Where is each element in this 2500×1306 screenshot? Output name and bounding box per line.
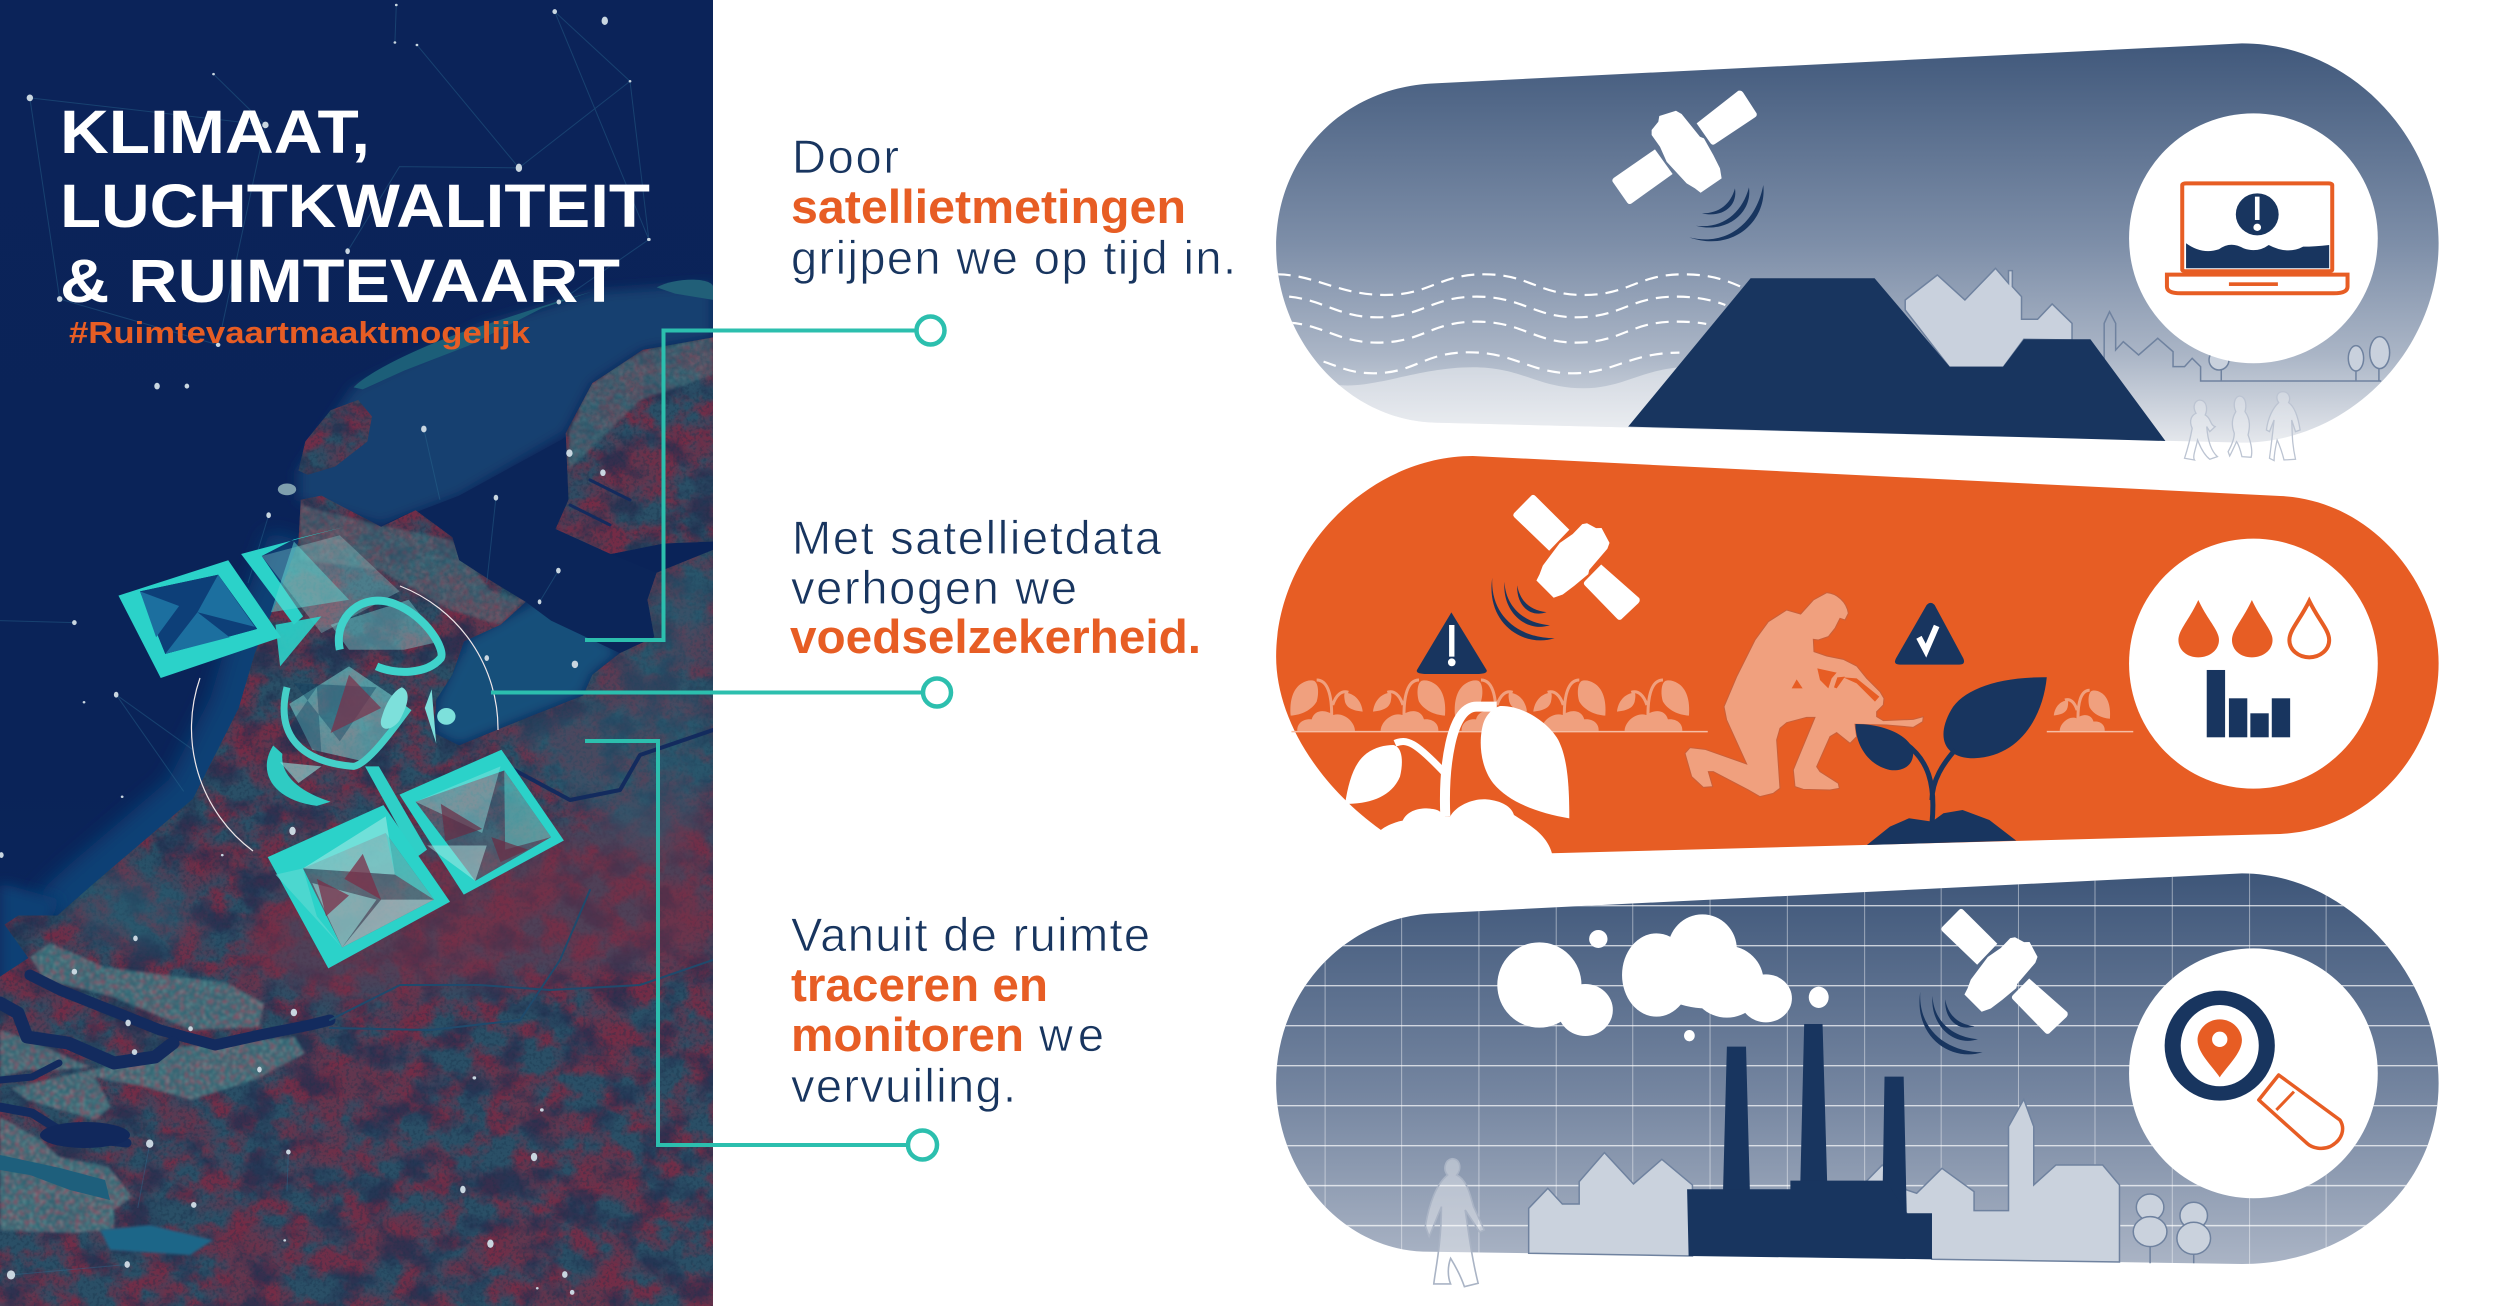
- dike: [1628, 278, 2165, 441]
- panel: satellite map: [0, 0, 713, 1306]
- connector: top line: [585, 316, 944, 640]
- text block: satellite measurements: [791, 130, 1236, 284]
- parcel: top right square: [241, 527, 400, 666]
- hashtag: #Ruimtevaartmaaktmogelijk: [69, 315, 531, 350]
- illustration: farmer: [1685, 593, 1923, 797]
- map: land texture: [0, 337, 713, 1306]
- text block: food security: voedselzekerheid.: [790, 610, 1201, 663]
- parcel: central rings: [267, 600, 456, 858]
- icon: laptop with flood alert: [2167, 183, 2348, 293]
- title: [60, 98, 650, 315]
- bar chart: [2207, 670, 2290, 737]
- title: KLIMAAT,: [60, 98, 370, 166]
- illustration: large white wilting plant: [1345, 706, 1569, 867]
- panel: pollution pill: [1270, 870, 2449, 1303]
- text block: satellite measurements: grijpen we op tijd in.: [791, 231, 1236, 284]
- text block: satellite measurements: Door: [792, 130, 899, 183]
- map: cyan parcel shapes: [118, 527, 564, 968]
- icon: check triangle: [1895, 603, 1964, 665]
- map: teal zones: [60, 550, 713, 950]
- text block: food security: verhogen we: [791, 561, 1077, 614]
- text block: pollution monitoring: Vanuit de ruimte: [791, 908, 1150, 961]
- icon: satellite with signal, food pill: [1475, 479, 1644, 648]
- circle: icon background: [2129, 539, 2378, 789]
- pill background and circle: [1276, 456, 2439, 853]
- map: thin orbit arc: [191, 586, 498, 851]
- water waves: [1278, 274, 1744, 430]
- text block: pollution monitoring: we: [1038, 1008, 1104, 1061]
- text block: pollution monitoring: traceren en: [791, 958, 1048, 1011]
- circle: magnifier background: [2129, 948, 2378, 1198]
- text block: food security: [790, 511, 1201, 663]
- panel: food security pill: [1276, 456, 2439, 867]
- seedlings: [1290, 680, 2110, 731]
- icon: satellite with signal, pollution pill: [1903, 893, 2072, 1062]
- map: central red zone: [240, 800, 713, 1000]
- map: Zeeland speckled fields: [0, 942, 306, 1234]
- title: LUCHTKWALITEIT: [60, 172, 650, 240]
- city skyline right: [1867, 1099, 2119, 1262]
- factory: [1687, 1024, 1932, 1259]
- text block: food security: Met satellietdata: [792, 511, 1162, 564]
- illustration: healthy navy plant: [1855, 677, 2047, 845]
- text block: pollution monitoring: vervuiling.: [791, 1059, 1016, 1112]
- title: & RUIMTEVAART: [60, 247, 620, 315]
- icon: magnifier with location pin: [2165, 991, 2343, 1148]
- map: coastal shallows: [0, 280, 713, 1008]
- parcel: smaller lower square: [400, 750, 564, 895]
- icon: satellite with signal, sea level pill: [1612, 91, 1764, 241]
- icon: water drops: [2178, 600, 2329, 657]
- city skyline left: [1529, 1153, 1692, 1256]
- smoke clouds: [1497, 914, 1829, 1041]
- city behind dike: [1905, 268, 2072, 367]
- map: rivers and estuaries: [0, 480, 713, 1143]
- icon: warning triangle: [1417, 612, 1487, 674]
- text block: pollution monitoring: monitoren: [791, 1008, 1024, 1061]
- person: [1425, 1159, 1484, 1287]
- map: network of dots and lines: [0, 4, 651, 1295]
- trees: [2133, 1194, 2211, 1263]
- connector: bottom line: [585, 741, 937, 1160]
- text block: satellite measurements: satellietmetingen: [791, 180, 1186, 233]
- parcel: large lower square: [268, 805, 450, 968]
- connector: middle line: [491, 678, 951, 706]
- parcel: top left square: [118, 560, 281, 678]
- text block: pollution monitoring: [791, 908, 1150, 1112]
- town and trees on the right: [2104, 312, 2390, 381]
- circle: laptop icon background: [2129, 113, 2378, 363]
- panel: sea level pill: [1276, 43, 2439, 461]
- people walking: [2185, 392, 2300, 461]
- grid overlay: [1277, 874, 2438, 1264]
